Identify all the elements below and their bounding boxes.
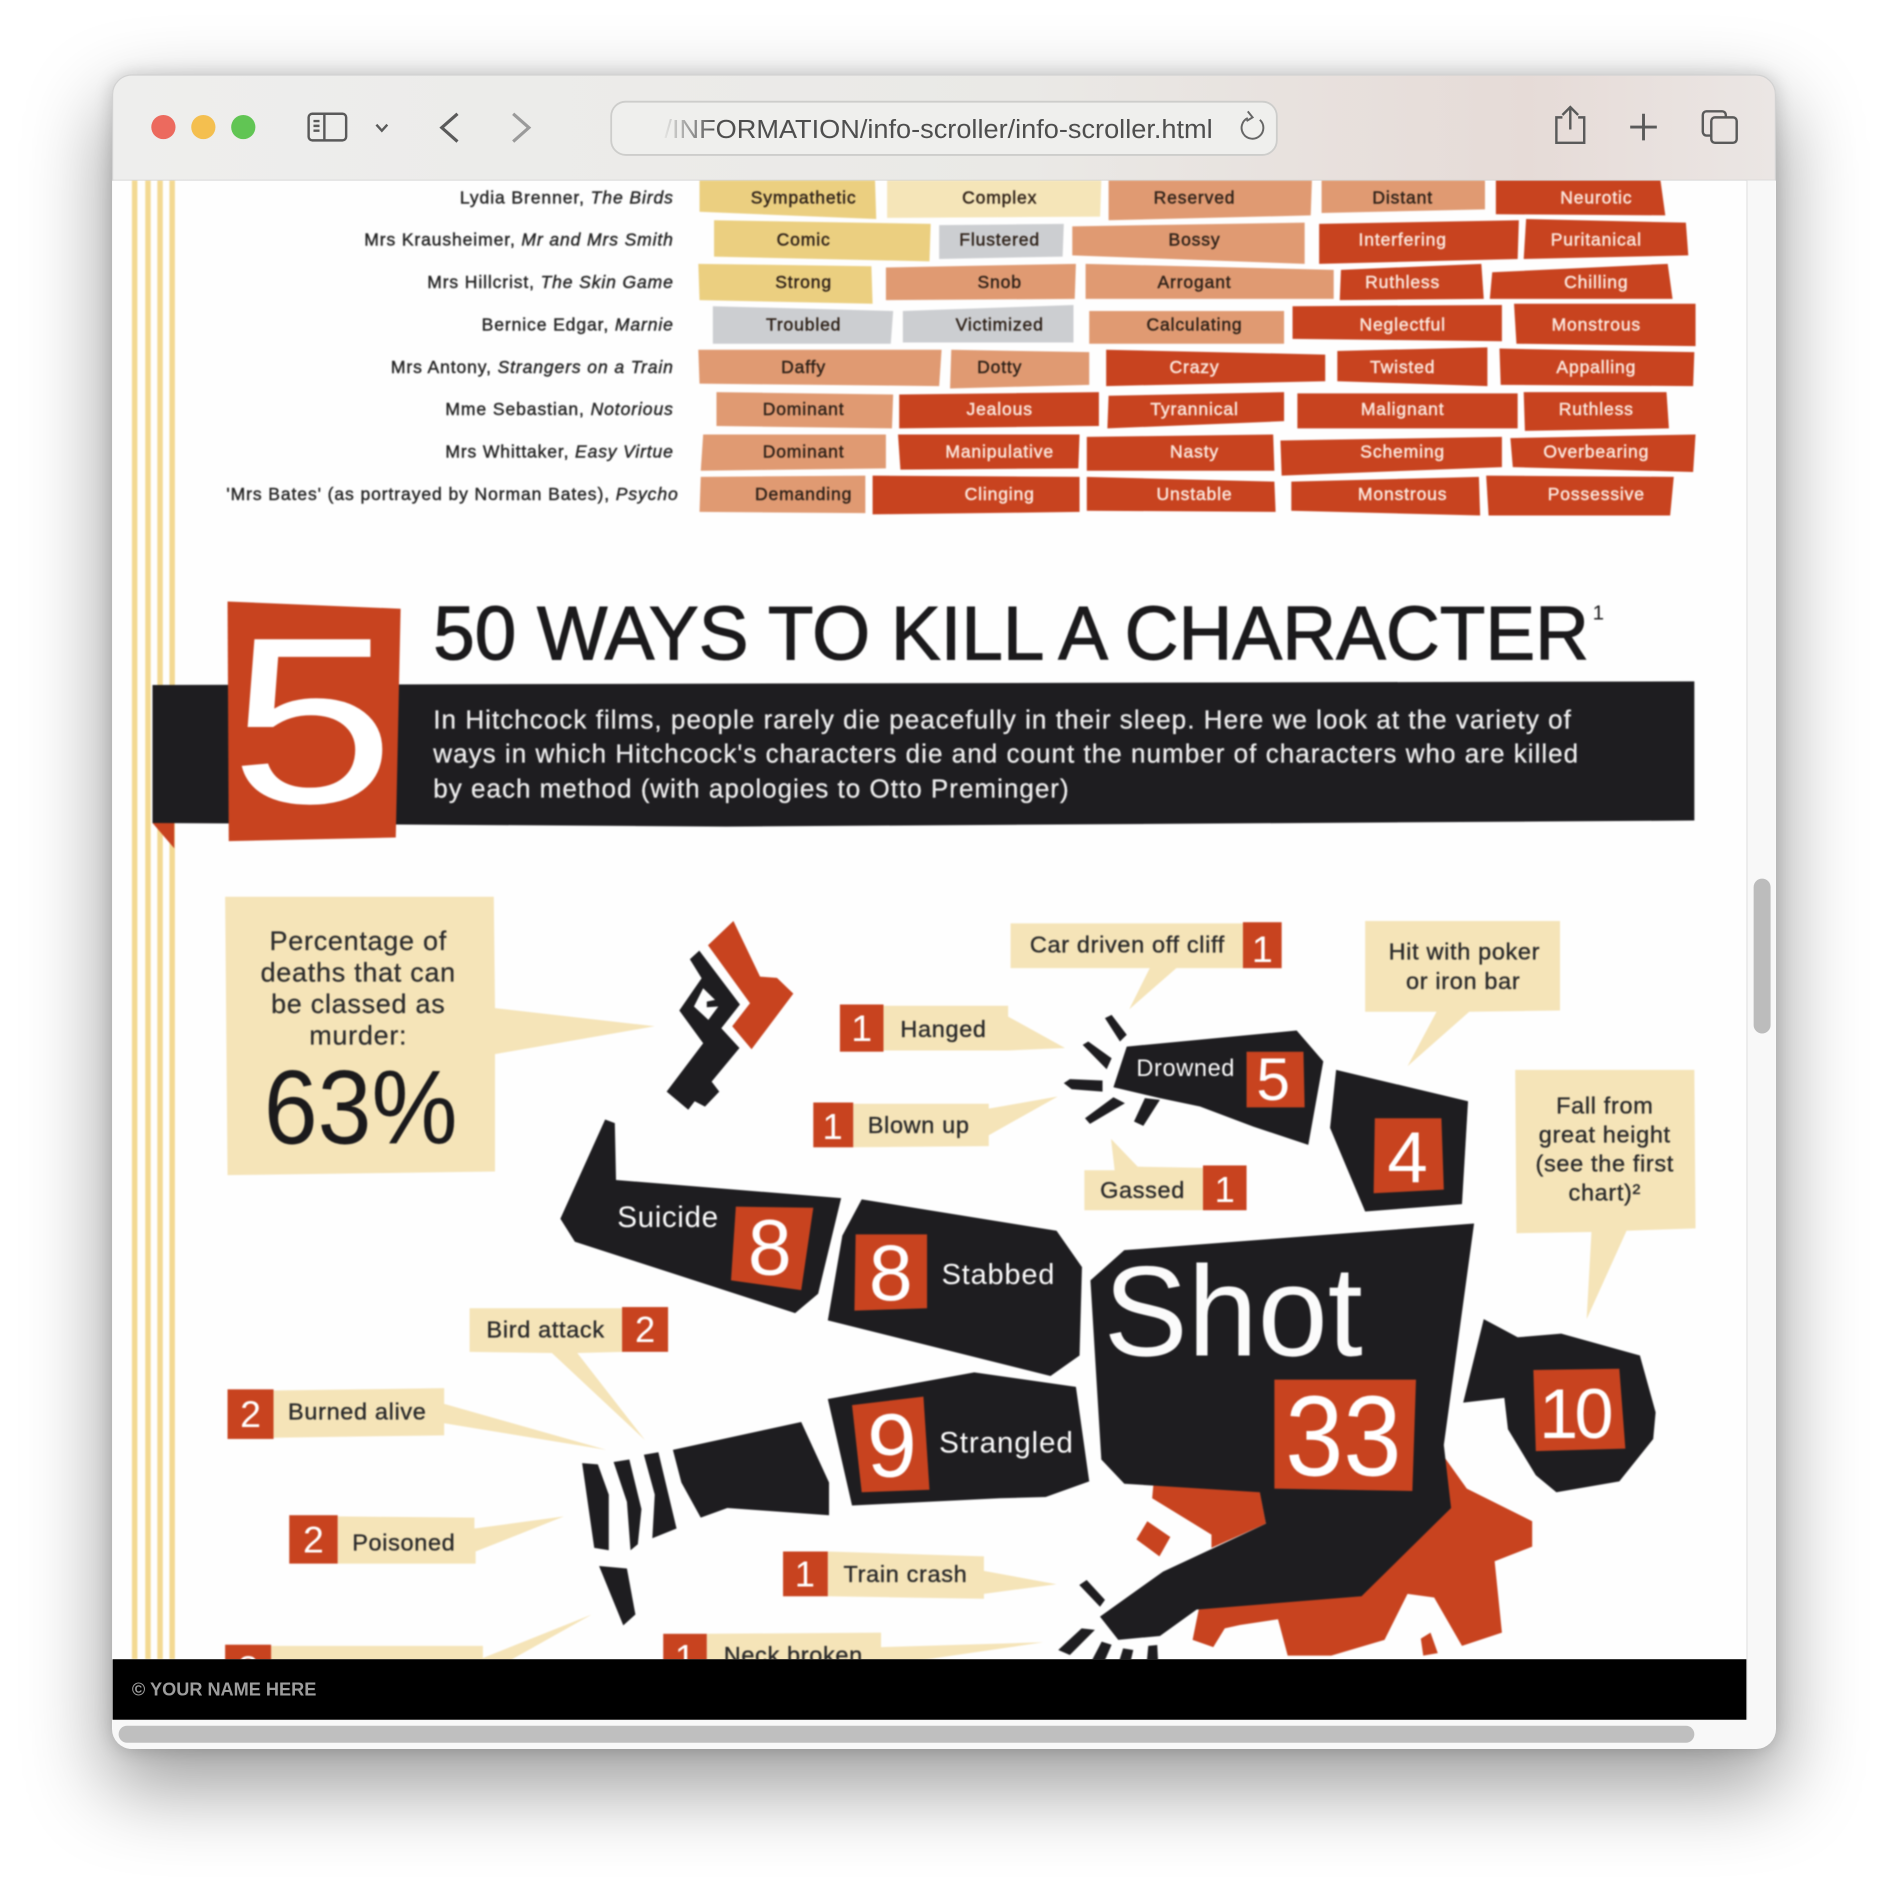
brick: Jealous: Jealous xyxy=(966,399,1033,419)
brick: Malignant xyxy=(1297,393,1518,428)
intro text: ways in which Hitchcock's characters die and count the number of characters who are killed xyxy=(432,738,1578,768)
brick: Distant: Distant xyxy=(1372,187,1433,207)
address bar: /INFORMATION/info-scroller/info-scroller.html xyxy=(664,114,1213,144)
count: 2 xyxy=(622,1307,668,1352)
brick: Ruthless: Ruthless xyxy=(1365,272,1440,292)
brick: Flustered: Flustered xyxy=(959,230,1040,250)
brick: Sympathetic xyxy=(700,180,876,219)
brick: Scheming: Scheming xyxy=(1360,441,1445,461)
brick: Possessive xyxy=(1486,476,1674,516)
count: 1 xyxy=(840,1004,883,1052)
brick: Unstable: Unstable xyxy=(1157,484,1233,504)
brick: Calculating xyxy=(1089,311,1284,344)
brick: Victimized xyxy=(903,305,1073,342)
brick: Interfering xyxy=(1319,220,1519,264)
upper arm: 4 xyxy=(1330,1070,1468,1211)
brick: Possessive: Possessive xyxy=(1548,484,1645,504)
count: 1 xyxy=(1203,1165,1247,1210)
brick: Dotty xyxy=(950,350,1089,388)
count: 1 xyxy=(783,1552,828,1596)
count: 1: 1 xyxy=(1252,928,1273,970)
brick: Manipulative: Manipulative xyxy=(945,441,1054,461)
icon: forward arrow xyxy=(513,114,529,142)
thigh: strangled 9: Strangled xyxy=(939,1426,1074,1459)
lower leg and striped sock xyxy=(582,1422,829,1625)
fingers xyxy=(1064,1015,1127,1124)
brick: Bossy: Bossy xyxy=(1169,230,1221,250)
brick: Puritanical: Puritanical xyxy=(1551,230,1642,250)
brick: Victimized: Victimized xyxy=(956,314,1044,334)
figure: dismembered body xyxy=(560,1015,1656,1664)
horizontal scrollbar xyxy=(113,1720,1746,1749)
count: 2 xyxy=(228,1389,274,1439)
brick: Bossy xyxy=(1072,223,1305,264)
brick: Manipulative xyxy=(898,434,1080,470)
intro text xyxy=(432,705,1578,804)
brick: Flustered xyxy=(939,224,1064,259)
brick: Complex: Complex xyxy=(962,187,1037,207)
brick: Monstrous xyxy=(1514,304,1696,346)
brick: Strong: Strong xyxy=(775,272,832,292)
thigh: strangled 9 xyxy=(828,1372,1089,1506)
callout: train crash xyxy=(783,1552,1057,1599)
page viewport xyxy=(113,180,1746,1693)
name: Mrs Hillcrist: Mrs Hillcrist, The Skin Game xyxy=(427,272,673,292)
brick: Twisted xyxy=(1337,347,1487,386)
name: Mrs Krausheimer: Mrs Krausheimer, Mr and Mrs Smith xyxy=(364,230,673,250)
brick: Overbearing xyxy=(1510,434,1696,472)
row: Mrs Bates xyxy=(226,476,1674,516)
intro text: In Hitchcock films, people rarely die peacefully in their sleep. Here we look at the variety of xyxy=(433,705,1572,735)
row: Lydia Brenner xyxy=(460,180,1665,220)
brick: Monstrous: Monstrous xyxy=(1358,484,1447,504)
callout: burned alive xyxy=(228,1388,606,1450)
leg: suicide 8: Suicide xyxy=(617,1201,719,1234)
arm: drowned 5: Drowned xyxy=(1136,1055,1235,1081)
blood splatter xyxy=(1136,1446,1532,1656)
brick: Reserved xyxy=(1109,180,1312,220)
callout: percentage murder xyxy=(225,897,655,1175)
count: 10: 10 xyxy=(1539,1374,1612,1453)
callout: poisoned: Poisoned xyxy=(352,1529,455,1555)
callout: bird attack xyxy=(470,1307,668,1440)
count: 1 xyxy=(663,1634,707,1682)
brick: Daffy xyxy=(698,350,942,386)
brick: Crazy: Crazy xyxy=(1170,357,1220,377)
browser toolbar xyxy=(113,75,1775,180)
callout: partly hidden bottom-left label xyxy=(225,1614,592,1693)
brick: Nasty: Nasty xyxy=(1170,441,1219,461)
page footer bar: © YOUR NAME HERE xyxy=(132,1680,316,1700)
brick: Appalling xyxy=(1499,349,1694,386)
section title: 1 xyxy=(1593,602,1604,625)
brick: Chilling: Chilling xyxy=(1564,272,1628,292)
callout: poisoned xyxy=(289,1515,564,1564)
brick: Neglectful: Neglectful xyxy=(1359,314,1446,334)
count: 4: 4 xyxy=(1387,1117,1428,1198)
brick: Ruthless: Ruthless xyxy=(1559,399,1634,419)
callout: blown up xyxy=(813,1096,1058,1147)
hand fingers: lower xyxy=(1058,1580,1158,1664)
thigh: stabbed 8: Stabbed xyxy=(942,1259,1055,1291)
count: 1 xyxy=(1243,922,1282,970)
callout: car driven off cliff xyxy=(1011,922,1282,1009)
brick: Unstable xyxy=(1087,477,1276,512)
count: 2 xyxy=(289,1515,338,1564)
count: 1: 1 xyxy=(1215,1169,1235,1210)
count: 8 xyxy=(731,1203,813,1291)
row: Bernice Edgar xyxy=(482,304,1696,346)
name: Mrs Bates: 'Mrs Bates' (as portrayed by Norman Bates), Psycho xyxy=(226,484,678,504)
count: 5: 5 xyxy=(1256,1045,1290,1113)
brick: Dominant: Dominant xyxy=(763,441,845,461)
thigh: stabbed 8 xyxy=(828,1199,1082,1376)
brick: Demanding xyxy=(700,476,865,513)
row: Mme Sebastian xyxy=(445,392,1669,431)
brick: Reserved: Reserved xyxy=(1154,187,1235,207)
name: Bernice Edgar: Bernice Edgar, Marnie xyxy=(482,314,673,334)
count: 2: 2 xyxy=(635,1309,655,1350)
count: 1 xyxy=(813,1103,853,1147)
brick: Chilling xyxy=(1490,264,1673,299)
vertical scrollbar thumb xyxy=(1754,879,1771,1034)
brick: Arrogant xyxy=(1086,264,1334,299)
brick: Troubled: Troubled xyxy=(766,314,841,334)
brick: Neurotic xyxy=(1496,180,1665,215)
brick: Dominant: Dominant xyxy=(763,399,845,419)
section header xyxy=(153,588,1694,853)
brick: Jealous xyxy=(899,392,1099,428)
callout: hit with poker: Hit with poker xyxy=(1389,939,1540,965)
brick: Nasty xyxy=(1087,434,1274,471)
row: Mrs Antony xyxy=(391,347,1694,388)
callout: percentage murder: deaths that can xyxy=(261,957,456,987)
brick: Neglectful xyxy=(1293,305,1502,341)
page footer bar xyxy=(113,1659,1746,1720)
brick: Comic: Comic xyxy=(777,230,831,250)
brick: Monstrous: Monstrous xyxy=(1552,314,1641,334)
brick: Appalling: Appalling xyxy=(1556,357,1636,377)
name: Mrs Antony: Mrs Antony, Strangers on a Train xyxy=(391,357,673,377)
callout: hanged: Hanged xyxy=(900,1016,987,1042)
torso: shot 33 xyxy=(1090,1224,1474,1640)
brick: Demanding: Demanding xyxy=(755,484,852,504)
intro text: by each method (with apologies to Otto Preminger) xyxy=(433,774,1069,804)
brick: Tyrannical: Tyrannical xyxy=(1150,399,1239,419)
brick: Overbearing: Overbearing xyxy=(1543,441,1649,461)
callout: percentage murder: murder: xyxy=(309,1020,407,1050)
callout: percentage murder: 63% xyxy=(264,1050,457,1167)
icon: gun xyxy=(667,921,793,1110)
icon: sidebar toggle xyxy=(309,114,346,140)
callout: gassed: Gassed xyxy=(1100,1177,1185,1203)
count: 1: 1 xyxy=(851,1007,872,1049)
count: 9 xyxy=(852,1395,929,1495)
intro banner xyxy=(153,681,1694,827)
callout: bird attack: Bird attack xyxy=(487,1316,605,1342)
section number 5: 5 xyxy=(230,588,395,853)
browser window frame xyxy=(112,75,1776,1749)
brick: Snob xyxy=(886,264,1076,300)
brick: Comic xyxy=(714,220,931,261)
count: 2: 2 xyxy=(240,1393,261,1435)
icon: dropdown chevron xyxy=(376,125,387,131)
brick: Crazy xyxy=(1106,350,1325,386)
brick: Dominant xyxy=(716,392,893,428)
brick: Twisted: Twisted xyxy=(1370,357,1435,377)
brick: Monstrous xyxy=(1291,477,1480,516)
brick: Strong xyxy=(698,264,873,304)
name: Mme Sebastian: Mme Sebastian, Notorious xyxy=(445,399,673,419)
count: 9: 9 xyxy=(867,1395,917,1495)
decorative side stripes xyxy=(132,180,175,1659)
address bar xyxy=(611,102,1277,155)
icon: new tab plus xyxy=(1630,114,1657,140)
count: 1: 1 xyxy=(675,1637,695,1678)
chart: character trait bricks xyxy=(226,180,1696,516)
callout: train crash: Train crash xyxy=(844,1561,967,1587)
name: Lydia Brenner: Lydia Brenner, The Birds xyxy=(460,187,673,207)
callout: burned alive: Burned alive xyxy=(288,1399,427,1425)
brick: Clinging: Clinging xyxy=(965,484,1035,504)
brick: Neurotic: Neurotic xyxy=(1560,187,1632,207)
callout: blown up: Blown up xyxy=(868,1112,970,1138)
callout: gassed xyxy=(1084,1139,1247,1210)
head: 10 xyxy=(1463,1319,1656,1492)
icon: share xyxy=(1556,107,1584,143)
count: 2 xyxy=(225,1645,271,1693)
callout: fall from great height: Fall from xyxy=(1556,1092,1653,1118)
brick: Interfering: Interfering xyxy=(1359,230,1447,250)
brick: Complex xyxy=(887,180,1101,218)
icon: back arrow xyxy=(442,114,457,142)
brick: Distant xyxy=(1322,180,1485,213)
brick: Snob: Snob xyxy=(977,272,1022,292)
count: 8 xyxy=(854,1229,927,1317)
brick: Troubled xyxy=(713,306,893,344)
count: 1: 1 xyxy=(823,1106,843,1147)
leg: suicide 8 xyxy=(560,1119,841,1313)
callout: car driven off cliff: Car driven off cliff xyxy=(1030,931,1225,957)
brick: Sympathetic: Sympathetic xyxy=(751,187,857,207)
count: 4 xyxy=(1374,1117,1444,1198)
callout: percentage murder: be classed as xyxy=(271,989,445,1019)
callout: fall from great height: great height xyxy=(1539,1121,1671,1147)
brick: Ruthless xyxy=(1340,264,1484,300)
count: 2: 2 xyxy=(238,1648,259,1690)
callout: fall from great height: chart)² xyxy=(1569,1180,1641,1206)
row: Mrs Whittaker xyxy=(445,434,1696,476)
row: Mrs Hillcrist xyxy=(427,264,1673,304)
brick: Clinging xyxy=(873,476,1080,514)
arm: drowned 5 xyxy=(1064,1015,1323,1145)
callout: neck broken: Neck broken xyxy=(724,1642,863,1668)
brick: Ruthless xyxy=(1524,392,1669,431)
name: Mrs Whittaker: Mrs Whittaker, Easy Virtue xyxy=(445,441,673,461)
brick: Tyrannical xyxy=(1107,392,1284,428)
callout: fall from great height: (see the first xyxy=(1536,1151,1674,1177)
brick: Daffy: Daffy xyxy=(781,357,826,377)
callout: hit with poker xyxy=(1365,921,1560,1066)
torso: shot 33: Shot xyxy=(1104,1240,1363,1383)
banner fold xyxy=(153,823,174,848)
infographic in browser window xyxy=(112,74,1776,1743)
count: 1: 1 xyxy=(795,1554,815,1595)
brick: Scheming xyxy=(1280,437,1502,476)
count: 8: 8 xyxy=(869,1229,913,1317)
brick: Puritanical xyxy=(1524,219,1688,259)
count: 5 xyxy=(1247,1045,1305,1113)
brick: Arrogant: Arrogant xyxy=(1158,272,1232,292)
brick: Calculating: Calculating xyxy=(1146,314,1243,334)
icon: reload xyxy=(1242,111,1263,139)
row: Mrs Krausheimer xyxy=(364,219,1688,264)
right scrollbar gutter xyxy=(1746,180,1775,1749)
brick: Malignant: Malignant xyxy=(1361,399,1444,419)
window control buttons xyxy=(151,115,255,139)
count: 2: 2 xyxy=(303,1519,324,1561)
section title: 50 WAYS TO KILL A CHARACTER xyxy=(433,592,1589,677)
count: 8: 8 xyxy=(748,1203,792,1291)
count: 33: 33 xyxy=(1285,1373,1401,1500)
callout: neck broken xyxy=(663,1633,1043,1682)
callout: hit with poker: or iron bar xyxy=(1406,968,1520,994)
callout: hanged xyxy=(840,1004,1065,1052)
callout: fall from great height xyxy=(1515,1070,1696,1319)
callout: percentage murder: Percentage of xyxy=(270,926,447,956)
brick: Dotty: Dotty xyxy=(977,357,1022,377)
brick: Dominant xyxy=(701,434,886,471)
icon: tabs overview xyxy=(1703,111,1737,143)
